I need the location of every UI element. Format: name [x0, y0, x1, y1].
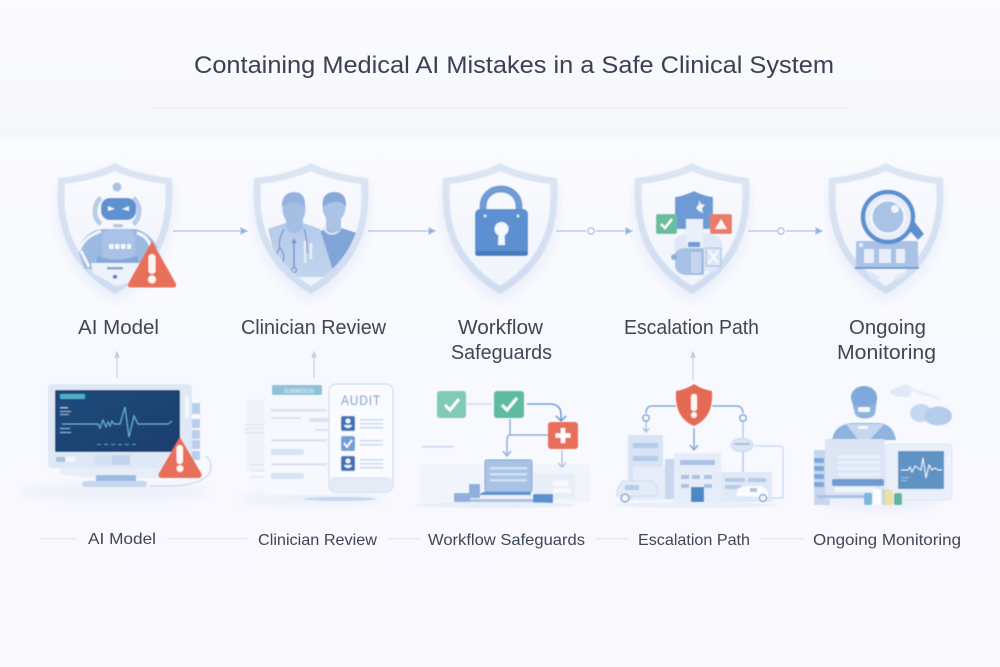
- icon: escalation stack: [656, 191, 732, 275]
- heading: AI Model: AI Model: [78, 317, 159, 339]
- shield: Ongoing Monitoring: [829, 163, 943, 300]
- control panel: [814, 439, 885, 505]
- heading: Workflow Safeguards: [451, 317, 552, 364]
- audit card: [329, 384, 393, 492]
- caption: Escalation Path: Escalation Path: [638, 532, 750, 549]
- caption: AI Model: AI Model: [88, 531, 156, 548]
- shield: Escalation Path: [635, 163, 749, 300]
- arrow: Clinician Review to Workflow Safeguards: [368, 228, 435, 234]
- icon: red alert shield: [676, 384, 712, 426]
- figure with head: [832, 386, 896, 442]
- laptop: [454, 460, 553, 503]
- title: Containing Medical AI Mistakes in a Safe Clinical System: [194, 52, 834, 79]
- building: hospital main: [674, 453, 721, 502]
- gateway pill: [731, 438, 753, 452]
- patient monitor: [886, 444, 952, 500]
- scene: audit documents: [240, 380, 393, 504]
- medical cross box: [548, 422, 578, 449]
- heading: Clinician Review: Clinician Review: [241, 317, 387, 339]
- caption: Ongoing Monitoring: Ongoing Monitoring: [813, 532, 961, 549]
- arrow with node: Workflow Safeguards to Escalation Path: [556, 228, 632, 234]
- icon: two clinicians: [268, 192, 357, 277]
- ambulance right: [736, 486, 768, 502]
- scene: escalation hospital: [613, 384, 783, 508]
- heading: Ongoing Monitoring: Monitoring: [837, 342, 936, 364]
- check box: [437, 391, 466, 418]
- scene: AI monitor with warning: [20, 384, 211, 499]
- scene: ongoing monitoring: [814, 384, 952, 508]
- escalation connectors: [643, 406, 783, 498]
- ambulance left: [617, 481, 658, 502]
- shield: Clinician Review: [254, 163, 368, 300]
- arrow with node: Escalation Path to Ongoing Monitoring: [748, 228, 822, 234]
- arrow: AI Model scene up: [115, 352, 119, 378]
- shield: AI Model: [58, 163, 176, 300]
- heading: Ongoing Monitoring: Ongoing: [849, 317, 926, 339]
- footer divider lines: [40, 538, 804, 539]
- building: left tower: [628, 435, 675, 500]
- caption: Clinician Review: Clinician Review: [258, 532, 377, 549]
- icon: padlock: [475, 189, 528, 256]
- heading: Workflow Safeguards: Workflow: [458, 317, 544, 339]
- speech bubbles: [890, 384, 952, 426]
- building: right wing: [720, 472, 772, 502]
- arrow: AI Model to Clinician Review: [173, 228, 247, 234]
- heading: Ongoing Monitoring: [837, 317, 936, 364]
- vials: [864, 489, 902, 505]
- title divider: [150, 107, 850, 108]
- audit card: AUDIT: [341, 393, 381, 408]
- icon: warning triangle: [128, 242, 176, 287]
- scene: audit documents: SUBMISSION: [284, 389, 314, 395]
- scene: workflow safeguards: [415, 391, 590, 508]
- workflow connectors: [467, 404, 566, 467]
- caption: Workflow Safeguards: Workflow Safeguards: [428, 532, 585, 549]
- shield: Workflow Safeguards: [443, 163, 557, 300]
- arrow: audit scene up: [312, 352, 316, 378]
- heading: Escalation Path: Escalation Path: [624, 317, 759, 339]
- icon: robot: [79, 182, 157, 286]
- icon: magnifier over dashboard: [855, 192, 924, 279]
- heading: Workflow Safeguards: Safeguards: [451, 342, 552, 364]
- arrow: escalation scene up: [691, 352, 695, 380]
- icon: warning triangle: [158, 437, 202, 478]
- check box: [494, 391, 524, 418]
